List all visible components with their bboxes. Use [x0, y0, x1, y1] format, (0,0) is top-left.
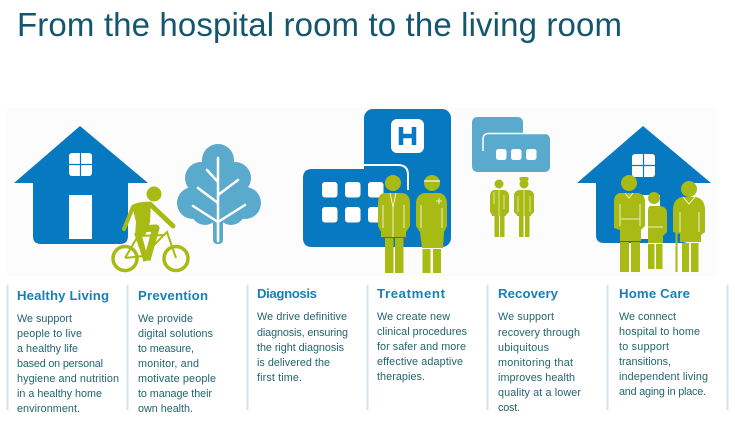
- column: Recovery: monitoring that: [498, 357, 573, 369]
- column: Prevention: to measure,: [138, 343, 194, 355]
- column: Prevention: own health.: [138, 403, 193, 415]
- column: Recovery: [498, 286, 581, 414]
- column: Prevention: motivate people: [138, 373, 216, 385]
- column: Recovery: ubiquitous: [498, 342, 550, 354]
- column: Recovery: recovery through: [498, 327, 580, 339]
- icon: tree: [177, 144, 261, 244]
- column: Home Care: We connect: [619, 311, 676, 323]
- column: Home Care: [619, 286, 708, 398]
- column: Prevention: Prevention: [138, 288, 208, 303]
- column: Healthy Living: based on personal: [17, 358, 103, 370]
- column: Treatment: Treatment: [377, 286, 446, 301]
- column: Treatment: effective adaptive: [377, 356, 463, 368]
- column: Treatment: We create new: [377, 311, 450, 323]
- column: Diagnosis: the right diagnosis: [257, 342, 345, 354]
- column: Home Care: Home Care: [619, 286, 690, 301]
- column: Treatment: therapies.: [377, 371, 425, 383]
- icon: small doctor: [490, 180, 509, 237]
- icon: small nurse: [514, 177, 534, 237]
- illustration: home care family: [577, 126, 711, 272]
- column: Recovery: Recovery: [498, 286, 559, 301]
- column: Recovery: cost.: [498, 402, 520, 414]
- icon: man: [614, 175, 645, 272]
- column: Home Care: to support: [619, 341, 669, 353]
- icon: cyclist: [113, 186, 188, 270]
- column: Healthy Living: in a healthy home: [17, 388, 102, 400]
- column: Diagnosis: We drive definitive: [257, 311, 347, 323]
- column: Healthy Living: hygiene and nutrition: [17, 373, 119, 385]
- column: Home Care: and aging in place.: [619, 386, 706, 398]
- icon: surgeon: [416, 175, 447, 273]
- icon: child: [648, 192, 667, 269]
- icon: hospital building: [303, 109, 451, 247]
- column: Recovery: quality at a lower: [498, 387, 581, 399]
- column: Diagnosis: first time.: [257, 372, 302, 384]
- icon: doctor: [378, 175, 410, 273]
- column: Treatment: clinical procedures: [377, 326, 468, 338]
- column: Healthy Living: people to live: [17, 328, 82, 340]
- column: Prevention: [138, 288, 216, 415]
- column: Prevention: monitor, and: [138, 358, 199, 370]
- column: Treatment: for safer and more: [377, 341, 466, 353]
- column: Diagnosis: diagnosis, ensuring: [257, 327, 348, 339]
- column: Prevention: to manage their: [138, 388, 212, 400]
- icon: house: [14, 126, 148, 244]
- column: Recovery: We support: [498, 311, 554, 323]
- illustration: recovery chat and care team: [472, 117, 550, 237]
- illustration: house with cyclist and tree: [14, 126, 261, 270]
- column: Recovery: improves health: [498, 372, 575, 384]
- illustration: hospital with doctors: [303, 109, 451, 273]
- column: Treatment: [377, 286, 468, 383]
- icon: elderly woman with cane: [673, 181, 705, 272]
- column: Healthy Living: We support: [17, 313, 72, 325]
- column: Diagnosis: is delivered the: [257, 357, 330, 369]
- column: Healthy Living: [17, 288, 119, 415]
- column: Healthy Living: environment.: [17, 403, 80, 415]
- column: Prevention: We provide: [138, 313, 193, 325]
- column: Home Care: hospital to home: [619, 326, 700, 338]
- column: Healthy Living: a healthy life: [17, 343, 78, 355]
- column: Healthy Living: Healthy Living: [17, 288, 109, 303]
- title: From the hospital room to the living room: [17, 6, 622, 43]
- column: Home Care: transitions,: [619, 356, 671, 368]
- column: Prevention: digital solutions: [138, 328, 214, 340]
- icon: home: [577, 126, 711, 243]
- column: Diagnosis: [257, 286, 348, 384]
- icon: chat bubbles: [472, 117, 550, 172]
- column: Home Care: independent living: [619, 371, 708, 383]
- column: Diagnosis: Diagnosis: [257, 286, 317, 301]
